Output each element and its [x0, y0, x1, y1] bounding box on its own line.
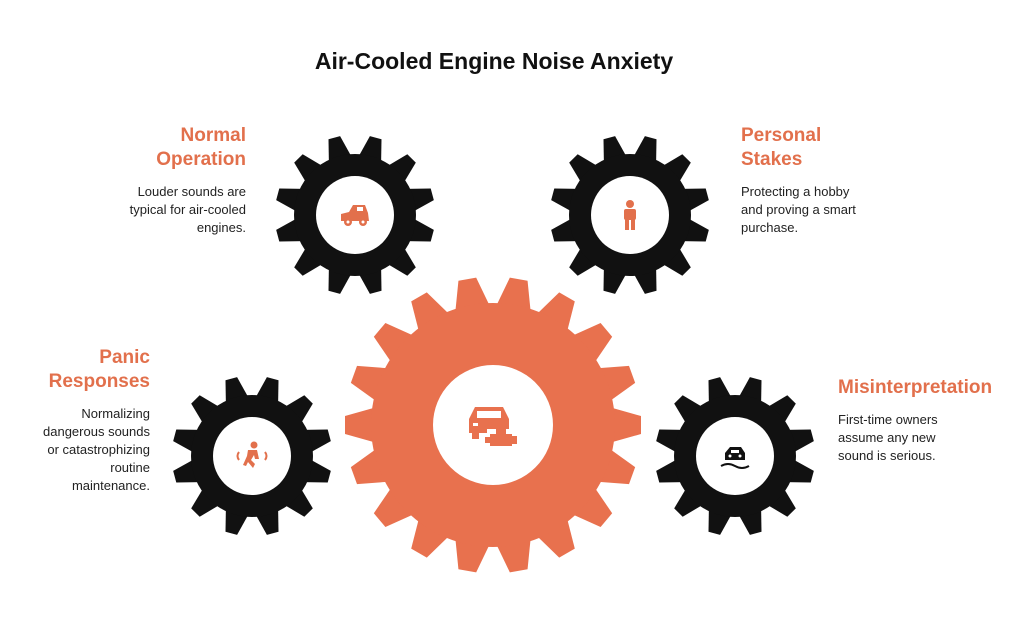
- heading: normal operation: Operation: [156, 149, 246, 170]
- heading: normal operation: Normal: [181, 125, 246, 146]
- heading: normal operation: [156, 125, 246, 170]
- text: panic responses: routine: [110, 460, 150, 475]
- heading: personal stakes: Stakes: [741, 149, 802, 170]
- icon: car: [341, 205, 369, 226]
- text: panic responses: dangerous sounds: [43, 424, 150, 439]
- heading: misinterpretation: Misinterpretation: [838, 377, 992, 398]
- text: normal operation: [130, 184, 246, 235]
- gear: misinterpretation: [655, 376, 815, 536]
- icon: running person: [238, 442, 266, 468]
- text: normal operation: Louder sounds are: [138, 184, 246, 199]
- icon: car skidding: [721, 447, 749, 468]
- text: personal stakes: [741, 184, 856, 235]
- text: personal stakes: and proving a smart: [741, 202, 856, 217]
- icon: car and engine: [469, 407, 517, 446]
- gear: normal operation: [275, 135, 435, 295]
- title: Air-Cooled Engine Noise Anxiety: [315, 48, 673, 74]
- text: panic responses: Normalizing: [81, 406, 150, 421]
- gear: central orange: [345, 276, 641, 574]
- text: normal operation: typical for air-cooled: [130, 202, 246, 217]
- heading: panic responses: [49, 347, 150, 392]
- text: misinterpretation: sound is serious.: [838, 448, 936, 463]
- heading: personal stakes: [741, 125, 821, 170]
- text: panic responses: maintenance.: [72, 478, 150, 493]
- text: personal stakes: purchase.: [741, 220, 798, 235]
- text: personal stakes: Protecting a hobby: [741, 184, 849, 199]
- gear: personal stakes: [550, 135, 710, 295]
- text: panic responses: or catastrophizing: [47, 442, 150, 457]
- text: misinterpretation: assume any new: [838, 430, 936, 445]
- icon: person: [624, 200, 636, 230]
- text: misinterpretation: [838, 412, 938, 463]
- text: misinterpretation: First-time owners: [838, 412, 938, 427]
- heading: panic responses: Responses: [49, 371, 150, 392]
- text: panic responses: [43, 406, 150, 493]
- text: normal operation: engines.: [197, 220, 246, 235]
- heading: panic responses: Panic: [99, 347, 150, 368]
- heading: personal stakes: Personal: [741, 125, 821, 146]
- gear: panic responses: [172, 376, 332, 536]
